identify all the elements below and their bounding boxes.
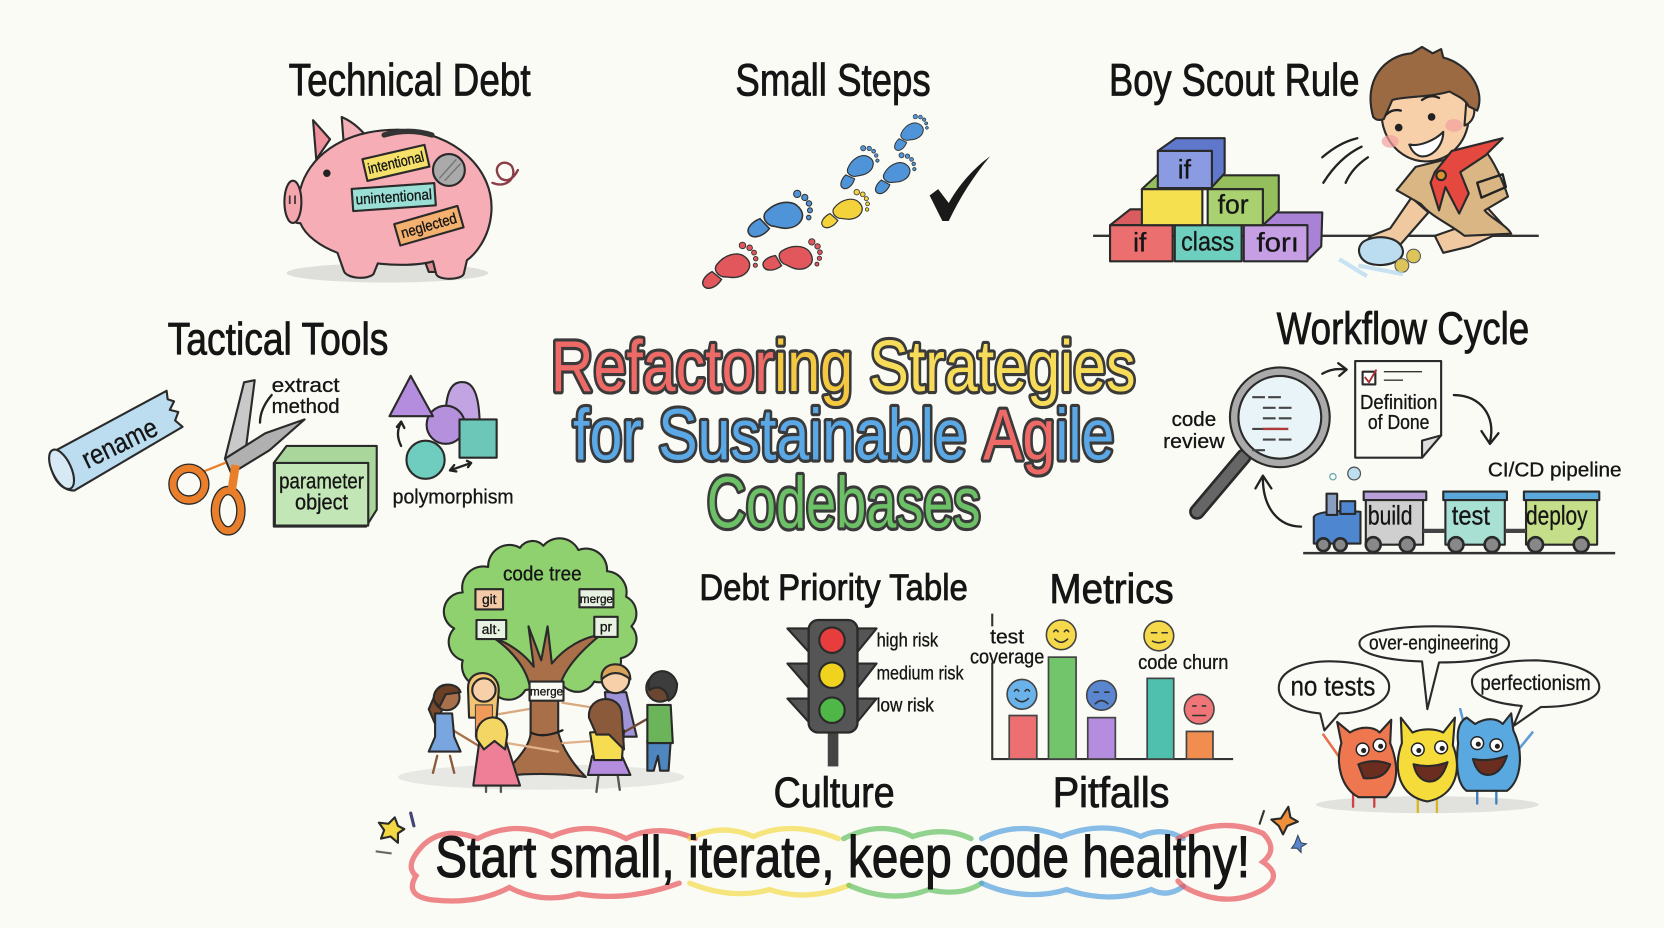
kid: left, brown ponytail bbox=[429, 685, 483, 773]
illustration: code blocks and scout: forı bbox=[1256, 228, 1299, 258]
closing message: Start small, iterate, keep code healthy! bbox=[435, 825, 1250, 890]
heading: Metrics: Metrics bbox=[1050, 566, 1174, 612]
illustration: code blocks and scout bbox=[1093, 47, 1539, 276]
label: low risk: low risk bbox=[877, 695, 934, 716]
illustration: piggy bank: intentional bbox=[366, 149, 426, 178]
label: extract method: extract bbox=[272, 375, 340, 397]
illustration: scissors bbox=[173, 380, 305, 531]
bar chart: metrics with smiley faces bbox=[992, 614, 1233, 759]
illustration: code tree with people bbox=[398, 538, 684, 792]
main title: Refactoring Strategies bbox=[551, 327, 1136, 407]
kid: right, dark hair bbox=[620, 671, 677, 771]
label: CI/CD pipeline: CI/CD pipeline bbox=[1488, 460, 1622, 482]
illustration: polymorphism shapes bbox=[389, 376, 497, 479]
main title: for Sustainable Agile bbox=[573, 396, 1114, 476]
illustration: code blocks and scout: if bbox=[1133, 228, 1147, 258]
main title bbox=[551, 327, 1136, 544]
kid: front left, pink dress bbox=[473, 718, 558, 792]
illustration: Definition of Done document: of Done bbox=[1368, 412, 1429, 434]
icon: right stars bbox=[1260, 807, 1306, 852]
label: high risk: high risk bbox=[877, 631, 939, 652]
label: test coverage bbox=[970, 626, 1044, 669]
label: test coverage: coverage bbox=[970, 647, 1044, 669]
illustration: traffic light bbox=[787, 620, 877, 766]
kid: front right, yellow and purple bbox=[562, 699, 630, 792]
label: polymorphism: polymorphism bbox=[393, 486, 514, 508]
illustration: code blocks and scout: class bbox=[1181, 227, 1234, 257]
illustration: footprints and check mark bbox=[699, 112, 990, 302]
kid: back left, blonde bbox=[468, 673, 528, 737]
speech bubbles: pitfalls: perfectionism bbox=[1480, 672, 1591, 695]
illustration: three monsters bbox=[1316, 709, 1539, 813]
illustration: CI/CD train: build bbox=[1368, 500, 1412, 530]
illustration: piggy bank bbox=[284, 117, 518, 283]
label: medium risk: medium risk bbox=[877, 663, 964, 684]
illustration: code tree with people: git bbox=[482, 592, 497, 607]
illustration: code tree with people: code tree bbox=[503, 564, 582, 586]
illustration: parameter object box: object bbox=[295, 490, 349, 515]
heading: Boy Scout Rule: Boy Scout Rule bbox=[1109, 55, 1359, 106]
illustration: code tree with people: merge bbox=[580, 593, 613, 606]
heading: Technical Debt: Technical Debt bbox=[289, 55, 531, 106]
illustration: CI/CD train: deploy bbox=[1526, 500, 1588, 530]
closing banner: wavy crayon outline bbox=[411, 825, 1273, 901]
text: method bbox=[272, 396, 340, 418]
heading: Tactical Tools: Tactical Tools bbox=[168, 314, 388, 365]
speech bubbles: pitfalls bbox=[1279, 626, 1599, 730]
speech bubbles: pitfalls: over-engineering bbox=[1369, 633, 1498, 655]
illustration: CI/CD train bbox=[1303, 467, 1615, 553]
heading: Culture: Culture bbox=[774, 769, 895, 816]
illustration: parameter object box bbox=[274, 446, 377, 527]
illustration: code blocks and scout: for bbox=[1218, 190, 1249, 220]
label: code churn: code churn bbox=[1138, 652, 1228, 674]
main title: Codebases bbox=[707, 464, 981, 544]
illustration: Definition of Done document bbox=[1355, 361, 1441, 458]
arrow: review to done bbox=[1322, 363, 1347, 376]
illustration: code tree with people: pr bbox=[600, 620, 612, 635]
kid: back right bbox=[562, 664, 637, 737]
arrow: pipeline to review bbox=[1255, 476, 1301, 527]
icon: left stars bbox=[376, 813, 414, 853]
speech bubbles: pitfalls: no tests bbox=[1290, 670, 1375, 701]
illustration: piggy bank: unintentional bbox=[355, 187, 432, 209]
illustration: code blocks and scout: if bbox=[1178, 155, 1192, 185]
illustration: code tree with people: alt· bbox=[482, 622, 501, 637]
illustration: piggy bank: neglected bbox=[399, 211, 459, 242]
heading: Pitfalls: Pitfalls bbox=[1053, 769, 1169, 816]
illustration: rename tape bbox=[44, 391, 183, 493]
label: test coverage: test bbox=[990, 626, 1024, 648]
heading: Small Steps: Small Steps bbox=[735, 55, 931, 106]
heading: Debt Priority Table: Debt Priority Table bbox=[699, 566, 968, 608]
illustration: magnifying glass bbox=[1197, 372, 1325, 512]
illustration: Definition of Done document: Definition bbox=[1360, 392, 1437, 414]
label: code review bbox=[1163, 409, 1225, 453]
label: code review: code bbox=[1172, 409, 1216, 431]
illustration: code tree with people: merge bbox=[530, 685, 563, 698]
illustration: parameter object box: parameter bbox=[279, 468, 364, 493]
arrow: done to pipeline bbox=[1454, 395, 1498, 444]
illustration: rename tape: rename bbox=[76, 411, 163, 475]
label: code review: review bbox=[1163, 431, 1225, 453]
illustration: CI/CD train: test bbox=[1452, 500, 1491, 530]
heading: Workflow Cycle: Workflow Cycle bbox=[1277, 303, 1529, 354]
